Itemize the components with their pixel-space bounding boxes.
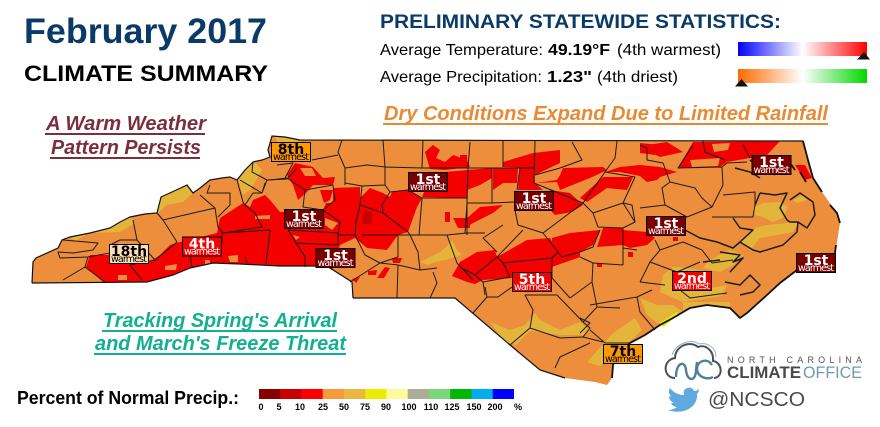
rank label: 4th warmest: 4th [189,236,215,252]
legend scale labels: 150 [466,402,482,412]
legend scale labels: % [514,402,522,412]
temperature statistic: Average Temperature: [380,42,543,59]
rank label: 5th warmest: 5th [519,272,545,288]
headline: warm weather pattern: Pattern Persists [51,137,201,159]
statistics heading: PRELIMINARY STATEWIDE STATISTICS: [380,12,781,33]
headline: dry conditions: Dry Conditions Expand Due to Limited Rainfall [384,103,828,125]
rank label: 1st warmest: 1st [804,253,829,269]
rank label: 18th warmest: 18th [111,244,147,260]
legend scale labels [258,402,522,412]
darker red spot 5 to 10 percent [362,210,372,224]
subtitle: CLIMATE SUMMARY [24,61,268,86]
rank label: 1st warmest: 1st [759,155,784,171]
legend scale labels: 125 [444,402,460,412]
logo wordmark: OFFICE [803,364,862,382]
icon: cloud with NC [666,342,721,379]
rank label: 8th warmest: warmest [273,152,309,163]
rank label: 2nd warmest [672,271,712,292]
county boundaries [58,140,815,368]
headline: warm weather pattern [45,113,207,159]
legend [17,388,522,412]
icon: twitter bird [668,388,699,412]
rank label: 1st warmest: warmest [286,219,322,230]
headline: warm weather pattern: A Warm Weather [45,113,207,135]
legend scale labels: 25 [318,402,328,412]
precipitation rank gauge [735,69,867,86]
rank label: 1st warmest [316,248,355,269]
twitter handle: @NCSCO [708,389,805,411]
legend scale labels: 50 [339,402,349,412]
rank label: 7th warmest [604,344,642,365]
orange flecks inside red patches [118,143,730,280]
precipitation statistic: 1.23" [547,69,592,86]
legend colour bar [259,389,514,399]
statistics panel [380,12,870,86]
legend scale labels: 200 [487,402,503,412]
rank label: 5th warmest [512,272,552,293]
temperature rank gauge [738,42,870,60]
map of North Carolina precipitation [32,136,840,385]
legend scale labels: 90 [381,402,391,412]
rank label: 8th warmest [272,142,310,163]
legend scale labels: 10 [295,402,305,412]
legend scale labels: 110 [424,402,438,412]
title: February 2017 [24,12,267,51]
logo wordmark: CLIMATE [727,364,801,382]
rank label: 1st warmest [408,172,448,193]
precipitation statistic: (4th driest) [597,69,678,86]
North Carolina Climate Office logo [666,342,862,382]
state base fill [32,136,840,385]
rank label: 1st warmest: warmest [754,165,790,176]
rank label: 1st warmest [752,155,791,176]
rank label: 1st warmest: warmest [798,263,834,274]
rank label: 1st warmest [796,253,836,274]
rank label: 2nd warmest: warmest [674,281,710,292]
rank label: 1st warmest: warmest [318,258,354,269]
rank label: 1st warmest: 1st [323,248,348,264]
rank label: 4th warmest: warmest [184,246,220,258]
rank label: 8th warmest: 8th [278,142,304,158]
precipitation statistic: Average Precipitation: [380,69,542,86]
rank label: 18th warmest: warmest [111,254,147,265]
logo wordmark [727,355,862,382]
headline: spring tracking: Tracking Spring's Arrival [103,310,337,332]
rank label: 4th warmest [182,236,222,258]
rank label: 1st warmest [514,191,554,212]
rank label: 7th warmest: 7th [610,344,636,360]
headline: spring tracking: and March's Freeze Threat [95,333,347,355]
rank label: 1st warmest [284,209,324,230]
rank label: 1st warmest: 1st [292,209,317,225]
gold patches 50 to 75 percent [68,136,807,366]
headline: spring tracking [94,310,347,355]
precipitation statistic [380,69,678,86]
yellow coastal strip [660,312,678,327]
temperature statistic: (4th warmest) [617,42,721,59]
rank label: 1st warmest: 1st [654,216,679,232]
red patches 10 to 25 percent [86,141,812,286]
legend title: Percent of Normal Precip.: [17,388,239,408]
legend scale labels: 5 [276,402,282,412]
legend scale labels: 100 [401,402,417,412]
legend scale labels: 75 [360,402,370,412]
rank label: 5th warmest: warmest [514,282,550,293]
rank label: 1st warmest: 1st [416,172,441,188]
rank label: 1st warmest: warmest [410,182,446,193]
sound and coastline detail [612,141,840,378]
temperature statistic [380,42,721,59]
state and coastal outline [32,136,803,378]
rank label: 1st warmest: warmest [648,226,684,237]
rank label: 1st warmest: 1st [522,191,547,207]
rank label: 1st warmest [646,216,686,237]
rank label: 2nd warmest: 2nd [677,271,707,287]
rank label: 1st warmest: warmest [516,201,552,212]
rank label: 7th warmest: warmest [605,354,641,365]
legend scale labels: 0 [258,402,264,412]
logo wordmark: NORTH CAROLINA [727,355,862,365]
temperature statistic: 49.19°F [548,42,610,59]
